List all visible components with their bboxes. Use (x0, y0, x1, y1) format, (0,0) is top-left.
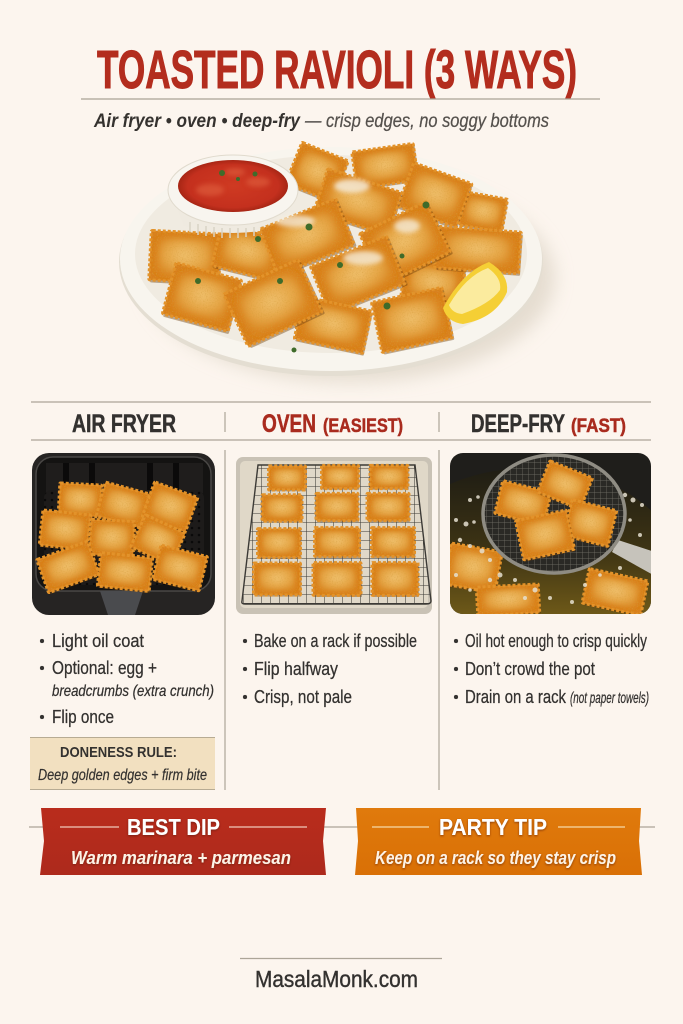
subtitle: — crisp edges, no soggy bottoms (304, 111, 549, 132)
heading: deep-fry (fast): DEEP-FRY (471, 410, 565, 438)
bullet list: air fryer: breadcrumbs (extra crunch) (52, 683, 214, 700)
bullet list: deep-fry: Drain on a rack (465, 687, 567, 707)
photo: ravioli on oven rack (236, 457, 432, 614)
photo: ravioli in fry basket over hot oil (450, 453, 651, 614)
bullet list: deep-fry: Don’t crowd the pot (465, 659, 595, 679)
heading: air fryer: AIR FRYER (72, 410, 176, 438)
heading: oven (easiest): (EASIEST) (323, 416, 403, 437)
bullet list: oven: Bake on a rack if possible (254, 631, 417, 651)
panel: deep-fry (450, 414, 651, 707)
callout: doneness rule: Deep golden edges + firm bite (38, 767, 207, 784)
heading: oven (easiest): OVEN (262, 410, 316, 438)
parmesan and herbs (195, 179, 430, 352)
plate (119, 147, 555, 382)
front ravioli (162, 198, 454, 356)
callout: doneness rule (30, 737, 215, 790)
banner: best dip (40, 808, 326, 875)
lemon wedge (443, 262, 507, 324)
subtitle: Air fryer • oven • deep-fry (93, 111, 301, 132)
panel: air fryer (30, 410, 215, 790)
banner: best dip: BEST DIP (127, 814, 220, 840)
bullet list: air fryer: Optional: egg + (52, 658, 157, 678)
banner: party tip: PARTY TIP (439, 814, 547, 840)
heading: deep-fry (fast): (FAST) (571, 416, 626, 437)
footer: website: MasalaMonk.com (255, 966, 418, 992)
banner: best dip: Warm marinara + parmesan (71, 848, 291, 868)
callout: doneness rule: DONENESS RULE: (60, 744, 177, 761)
hero image: plate of toasted ravioli (119, 142, 555, 382)
banner: party tip (355, 808, 642, 875)
bullet list: air fryer: Flip once (52, 707, 114, 727)
bullet list: oven (243, 631, 417, 707)
section rules (31, 402, 651, 790)
banner: party tip: Keep on a rack so they stay crisp (375, 848, 616, 868)
panel: oven (236, 410, 432, 707)
subtitle (93, 111, 549, 132)
photo: air fryer basket (32, 453, 215, 615)
bullet list: air fryer (40, 631, 214, 727)
bullet list: deep-fry (454, 631, 649, 707)
bullet list: oven: Crisp, not pale (254, 687, 352, 707)
bullet list: air fryer: Light oil coat (52, 631, 144, 651)
bullet list: oven: Flip halfway (254, 659, 338, 679)
heading: oven (easiest) (262, 410, 403, 438)
back ravioli (149, 142, 523, 309)
ramekin of marinara (168, 155, 298, 238)
